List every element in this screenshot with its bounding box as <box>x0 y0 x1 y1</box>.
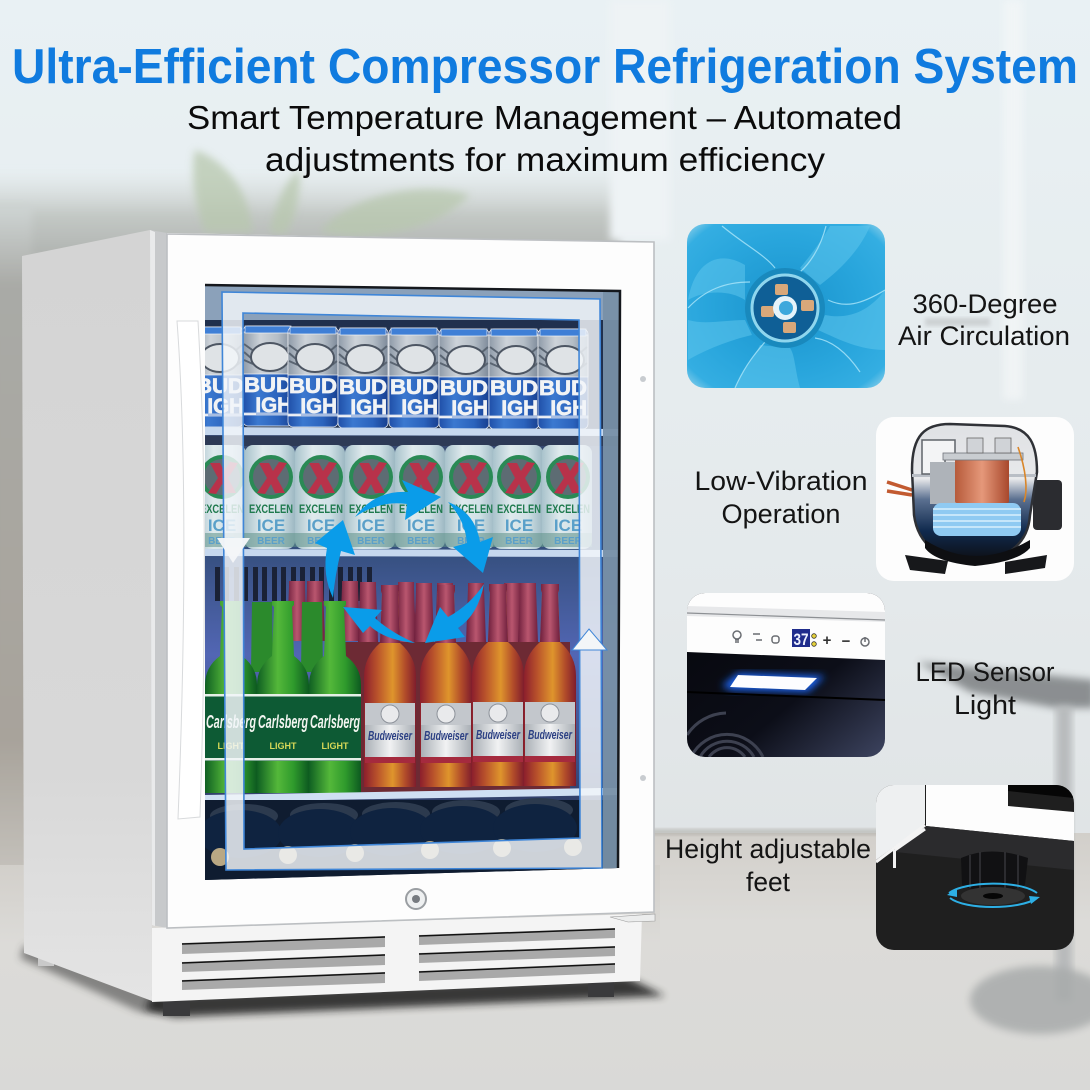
panel: LED control panel: + <box>823 632 832 649</box>
shelf 2 cans: Excelent Ice Beer: EXCELEN <box>349 502 393 516</box>
compressor terminal box <box>1033 480 1062 530</box>
label: LED Sensor Light <box>916 657 1055 720</box>
shelf 2 cans: Excelent Ice Beer: ICE <box>457 516 485 535</box>
shelf 3 green Carlsberg bottles: Carlsberg <box>310 712 360 732</box>
shelf 3 amber Budweiser bottles: Budweiser <box>368 728 413 743</box>
shelf 1 cans: Bud Light: BUD <box>196 375 244 398</box>
shelf 1 cans: Bud Light: BUD <box>339 376 387 399</box>
right edge shading <box>603 285 620 885</box>
glass interior <box>193 280 625 885</box>
bottom grille <box>152 914 642 1002</box>
rotation arrows <box>949 884 1037 907</box>
label: Height adjustable feet: Height adjustable <box>665 834 871 864</box>
shelf 1 cans: Bud Light: _IGH <box>288 395 337 418</box>
shelf 2 cans: Excelent Ice Beer: BEER <box>505 536 534 547</box>
airflow arrow: up <box>572 629 607 650</box>
floor shadow: side <box>20 945 170 1012</box>
shelf 3 green Carlsberg bottles: LIGHT <box>218 741 245 751</box>
door lock <box>406 889 426 909</box>
copper coil <box>955 459 1009 503</box>
control icons <box>733 631 869 646</box>
label: Low-Vibration Operation: Low-Vibration <box>694 466 868 496</box>
shelf 2 cans: Excelent Ice Beer: ICE <box>407 516 435 535</box>
shelf 1 cans: Bud Light: _IGH <box>538 397 587 420</box>
LED light <box>722 673 825 692</box>
shelf 2 cans: Excelent Ice Beer: BEER <box>457 536 486 547</box>
airflow frame overlay <box>222 292 602 870</box>
shelf 1 cans: Bud Light <box>205 320 603 429</box>
shelf 2 cans: Excelent Ice Beer: EXCELEN <box>299 502 343 516</box>
subtitle: adjustments for maximum efficiency <box>265 141 826 178</box>
beverage refrigerator <box>20 230 665 1017</box>
fan hub <box>745 268 825 348</box>
circular airflow arrows <box>315 480 493 643</box>
shelf 2 cans: Excelent Ice Beer: ICE <box>208 516 236 535</box>
shelf 3 green Carlsberg bottles: Carlsberg <box>206 712 256 732</box>
label: 360-Degree Air Circulation <box>898 289 1070 351</box>
floor shadow: front <box>145 976 665 1017</box>
shelf 2 cans: Excelent Ice Beer: EXCELEN <box>200 502 244 516</box>
label: Height adjustable feet: feet <box>746 867 791 897</box>
panel: adjustable foot <box>876 785 1074 950</box>
shelf 1 cans: Bud Light: BUD <box>244 374 292 397</box>
shelf 2 cans: Excelent Ice Beer <box>196 445 592 549</box>
shelf 2 cans: Excelent Ice Beer: EXCELEN <box>546 502 590 516</box>
shelf 1 cans: Bud Light: _IGH <box>389 396 438 419</box>
shelf 1 cans: Bud Light: _IGH <box>195 395 244 418</box>
copper pipes <box>887 482 912 495</box>
glass border <box>205 285 620 868</box>
label: Low-Vibration Operation: Operation <box>722 499 840 529</box>
shelf 3 back bottles <box>287 581 570 792</box>
shelf 2 cans: Excelent Ice Beer: BEER <box>357 536 386 547</box>
shelf 2 cans: Excelent Ice Beer: ICE <box>307 516 335 535</box>
shelf 1 cans: Bud Light: BUD <box>440 377 488 400</box>
panel: LED control panel: − <box>842 633 851 650</box>
bottom wine bottles <box>198 798 625 885</box>
shelf 2 cans: Excelent Ice Beer: BEER <box>307 536 336 547</box>
panel: LED control panel <box>687 593 885 757</box>
door screws <box>640 376 646 781</box>
shelf 2 cans: Excelent Ice Beer: ICE <box>505 516 533 535</box>
shelf 2 cans: Excelent Ice Beer: EXCELEN <box>497 502 541 516</box>
shelf 3 green Carlsberg bottles: LIGHT <box>270 741 297 751</box>
shelf 3 amber Budweiser bottles: Budweiser <box>476 727 521 742</box>
shelf 1 cans: Bud Light: BUD <box>390 376 438 399</box>
label: LED Sensor Light: LED Sensor <box>916 657 1055 687</box>
label: 360-Degree Air Circulation: 360-Degree <box>912 289 1058 319</box>
shelf 3 amber Budweiser bottles: Budweiser <box>528 727 573 742</box>
door handle <box>177 321 204 819</box>
shelf 2 cans: Excelent Ice Beer: BEER <box>208 536 237 547</box>
panel: compressor <box>876 417 1074 581</box>
shelf 1 cans: Bud Light: _IGH <box>489 397 538 420</box>
top ceiling and light <box>205 285 620 320</box>
vent slots <box>215 567 372 601</box>
label: Low-Vibration Operation <box>694 466 868 529</box>
shelf 2 cans: Excelent Ice Beer: BEER <box>257 536 286 547</box>
temperature display: 37 <box>794 630 808 649</box>
foot knob <box>961 852 1028 892</box>
shelf 2 cans: Excelent Ice Beer: ICE <box>357 516 385 535</box>
shelf 1 cans: Bud Light: _IGH <box>243 394 292 417</box>
shelf 2 cans: Excelent Ice Beer: BEER <box>554 536 583 547</box>
vent arcs <box>687 713 763 757</box>
shelf line 3 <box>205 788 617 800</box>
shelf 1 cans: Bud Light: BUD <box>539 377 587 400</box>
shelf 3 amber Budweiser bottles <box>364 584 576 787</box>
shelf 2 cans: Excelent Ice Beer: ICE <box>257 516 285 535</box>
airflow arrow: down <box>217 538 250 563</box>
shelf 2 cans: Excelent Ice Beer: BEER <box>407 536 436 547</box>
shelf 1 cans: Bud Light: _IGH <box>338 396 387 419</box>
shelf line 2 <box>205 549 620 557</box>
subtitle: Smart Temperature Management – Automated <box>187 99 902 136</box>
shelf 3 green Carlsberg bottles: LIGHT <box>322 741 349 751</box>
side panel <box>22 230 152 1001</box>
shelf 2 cans: Excelent Ice Beer: ICE <box>554 516 582 535</box>
panel: fan <box>687 224 885 388</box>
shelf 2 cans: Excelent Ice Beer: EXCELEN <box>449 502 493 516</box>
fan blades <box>688 226 885 388</box>
shelf 1 cans: Bud Light: BUD <box>490 377 538 400</box>
label: Height adjustable feet <box>665 834 871 897</box>
shelf line 1 <box>205 427 620 436</box>
shelf 3 green Carlsberg bottles: Carlsberg <box>258 712 308 732</box>
shelf 1 cans: Bud Light: BUD <box>289 375 337 398</box>
shelf 3 green Carlsberg bottles <box>205 601 361 793</box>
shelf edge <box>687 692 885 700</box>
label: 360-Degree Air Circulation: Air Circulation <box>898 321 1070 351</box>
shelf 2 cans: Excelent Ice Beer: EXCELEN <box>249 502 293 516</box>
door <box>167 233 654 928</box>
feet <box>38 958 614 1016</box>
shelf 3 amber Budweiser bottles: Budweiser <box>424 728 469 743</box>
shelf 1 cans: Bud Light: _IGH <box>439 397 488 420</box>
compressor base <box>925 540 1030 566</box>
compressor dome <box>912 424 1037 561</box>
blue cooling fins <box>933 503 1021 536</box>
label: LED Sensor Light: Light <box>954 690 1017 720</box>
shelf 2 cans: Excelent Ice Beer: EXCELEN <box>399 502 443 516</box>
subtitle <box>187 99 902 178</box>
side trim strip <box>150 230 167 928</box>
